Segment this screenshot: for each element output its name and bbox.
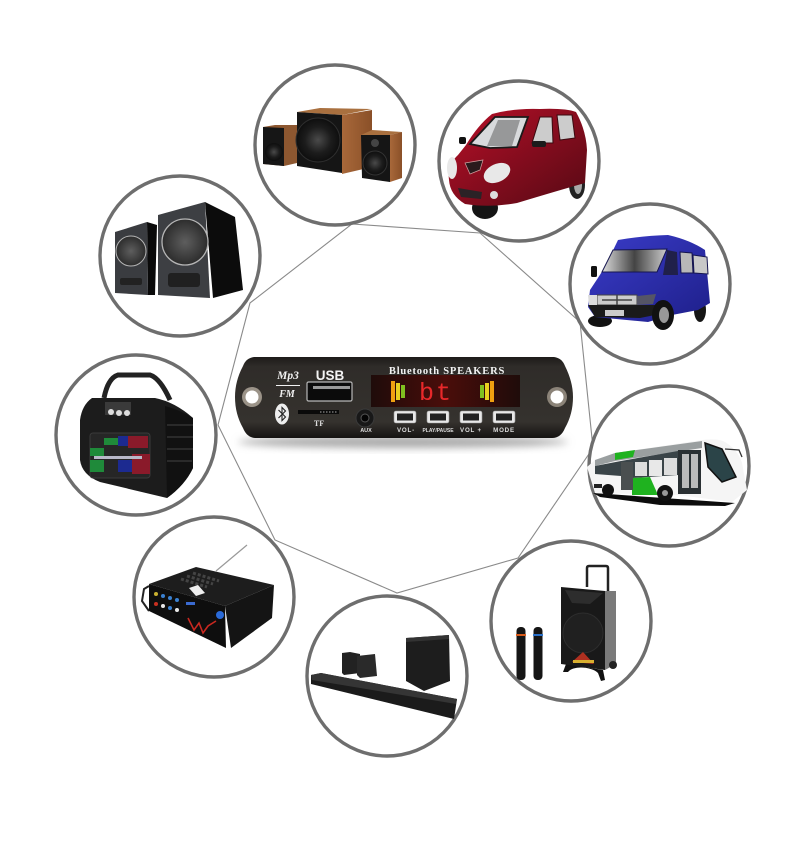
module body (235, 357, 573, 438)
button labels: VOL- (397, 427, 415, 434)
shadow under module (238, 436, 568, 448)
circle: blue van (570, 204, 730, 364)
level meter right (480, 381, 494, 402)
circle: soundbar system (307, 596, 467, 756)
mounting holes (242, 387, 567, 407)
circle: trolley speaker with microphones (491, 541, 651, 701)
title on module: Bluetooth SPEAKERS (389, 366, 505, 377)
Mp3 FM logo: FM (278, 389, 296, 400)
control buttons (394, 411, 515, 423)
USB label: USB (316, 368, 344, 383)
level meter left (391, 381, 405, 402)
button labels (397, 427, 515, 434)
button labels: PLAY/PAUSE (422, 428, 454, 434)
TF slot (298, 410, 339, 428)
button icons (397, 414, 512, 420)
Mp3 FM logo: Mp3 (276, 370, 299, 382)
circle: city bus (587, 386, 749, 546)
AUX jack (356, 409, 374, 434)
connecting polygon (218, 224, 593, 593)
Mp3 FM logo (276, 370, 300, 400)
TF slot: TF (314, 419, 324, 428)
Bluetooth badge (275, 404, 289, 424)
central Bluetooth MP3 module (235, 357, 573, 438)
circle: red car (439, 81, 599, 241)
display readout: bt (419, 379, 453, 408)
circle: portable party speaker (56, 355, 216, 515)
circle: bookshelf speakers (100, 176, 260, 336)
button labels: VOL + (460, 427, 482, 434)
USB port (307, 382, 352, 401)
button labels: MODE (493, 427, 515, 434)
LED display (371, 375, 520, 408)
AUX jack: AUX (360, 428, 372, 434)
circle: 2.1 speaker set (255, 65, 415, 225)
circle: stereo amplifier (134, 517, 294, 677)
